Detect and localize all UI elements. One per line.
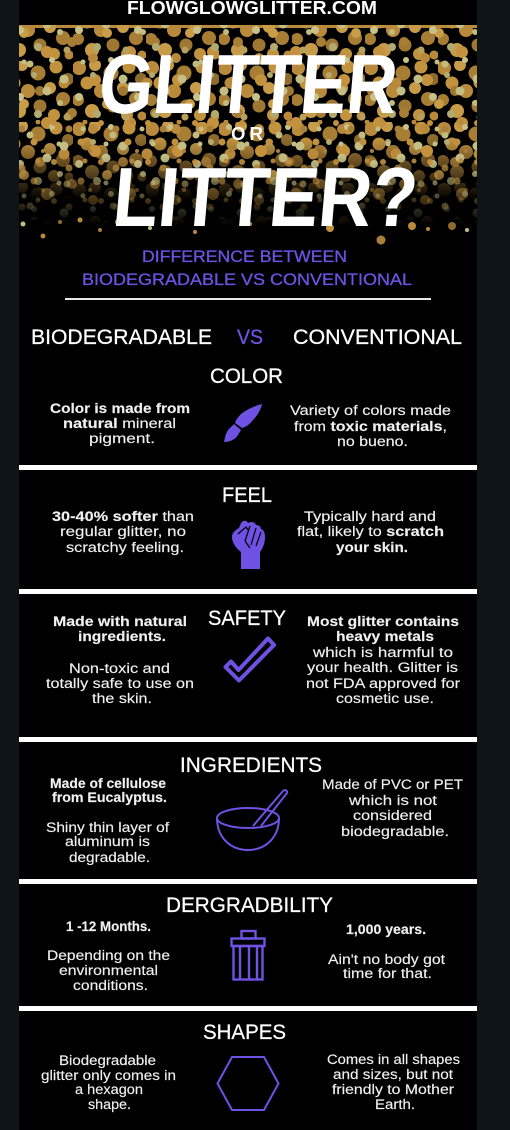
text: conventional safety: Most glitter contains xyxy=(307,614,459,629)
text: conventional shapes: friendly to Mother xyxy=(332,1082,455,1097)
title: litter?: LITTER? xyxy=(109,150,422,244)
text: biodegradable feel: regular glitter, no xyxy=(60,524,186,539)
text: conventional ingredients xyxy=(322,777,463,839)
icon: paintbrush xyxy=(224,404,262,442)
text: biodegradable ingredients xyxy=(46,776,169,865)
section: shapes xyxy=(41,1021,460,1112)
icon: trash can xyxy=(232,931,264,980)
text: biodegradable safety: totally safe to use on xyxy=(46,676,194,691)
text: biodegradable shapes: shape. xyxy=(88,1097,131,1112)
text: biodegradable degradability: environmental xyxy=(59,963,158,978)
text: conventional safety: your health. Glitter is xyxy=(307,660,458,675)
text: biodegradable shapes: a hexagon xyxy=(75,1082,143,1097)
text: biodegradable shapes: glitter only comes in xyxy=(41,1068,176,1083)
comparison header: CONVENTIONAL xyxy=(293,326,462,349)
text: conventional degradability xyxy=(328,922,445,981)
text: conventional ingredients: considered xyxy=(353,808,432,823)
heading: safety: SAFETY xyxy=(208,607,286,630)
icon: hexagon xyxy=(218,1057,278,1110)
text: biodegradable color: pigment. xyxy=(89,431,155,446)
text: conventional feel: flat, likely to scratch xyxy=(297,524,444,539)
text: conventional degradability: time for that. xyxy=(343,966,432,981)
text: biodegradable color: Color is made from xyxy=(50,401,190,416)
text: biodegradable feel: 30-40% softer than xyxy=(52,509,194,524)
text: biodegradable ingredients: degradable. xyxy=(69,850,150,865)
text: biodegradable ingredients: Shiny thin layer of xyxy=(46,820,169,835)
text: conventional color: from toxic materials , xyxy=(294,419,447,434)
icon: bowl and spoon xyxy=(217,790,287,850)
heading: feel: FEEL xyxy=(222,484,272,507)
text: conventional feel: your skin. xyxy=(336,540,408,555)
text: conventional degradability: Ain't no body got xyxy=(328,952,445,967)
section: safety xyxy=(46,607,461,706)
text: biodegradable degradability: 1 -12 Months. xyxy=(66,919,151,934)
icon: raised fist xyxy=(232,521,265,569)
text: biodegradable ingredients: from Eucalyptus. xyxy=(52,790,167,805)
text: biodegradable color: natural mineral xyxy=(63,416,176,431)
text: conventional color: Variety of colors made xyxy=(290,403,451,418)
text: biodegradable feel xyxy=(52,509,194,555)
text: biodegradable degradability: Depending on the xyxy=(47,948,170,963)
text: biodegradable color xyxy=(50,401,190,446)
heading: degradability: DERGRADBILITY xyxy=(166,894,333,917)
text: conventional color xyxy=(290,403,451,449)
icon: check mark xyxy=(226,638,274,680)
comparison header xyxy=(31,326,462,349)
text: biodegradable feel: scratchy feeling. xyxy=(66,540,184,555)
section: ingredients xyxy=(46,754,463,865)
section: degradability xyxy=(47,894,445,993)
text: conventional safety: heavy metals xyxy=(336,629,434,644)
heading: ingredients: INGREDIENTS xyxy=(180,754,322,777)
heading: color: COLOR xyxy=(210,365,283,388)
text: biodegradable degradability xyxy=(47,919,170,993)
text: conventional ingredients: which is not xyxy=(348,793,437,808)
text: biodegradable safety: Made with natural xyxy=(53,614,187,629)
subtitle: BIODEGRADABLE VS CONVENTIONAL xyxy=(82,270,412,289)
subtitle: DIFFERENCE BETWEEN xyxy=(142,247,347,266)
text: conventional feel: Typically hard and xyxy=(304,509,436,524)
heading: shapes: SHAPES xyxy=(203,1021,286,1044)
text: conventional shapes xyxy=(327,1052,460,1112)
text: biodegradable ingredients: aluminum is xyxy=(65,834,150,849)
title: or: OR xyxy=(231,124,267,144)
text: conventional ingredients: Made of PVC or PET xyxy=(322,777,463,792)
section: feel xyxy=(52,484,444,569)
text: conventional shapes: Comes in all shapes xyxy=(327,1052,460,1067)
text: biodegradable safety: ingredients. xyxy=(78,629,166,644)
text: conventional safety: not FDA approved for xyxy=(306,676,461,691)
text: biodegradable safety xyxy=(46,614,194,706)
text: conventional safety: which is harmful to xyxy=(312,645,453,660)
subtitle xyxy=(82,247,412,289)
text: conventional degradability: 1,000 years. xyxy=(346,922,426,937)
text: biodegradable ingredients: Made of cellulose xyxy=(50,776,167,791)
comparison header: BIODEGRADABLE xyxy=(31,326,212,349)
text: biodegradable shapes xyxy=(41,1053,176,1112)
text: conventional safety xyxy=(306,614,461,706)
section: color xyxy=(50,365,451,449)
text: conventional feel xyxy=(297,509,444,555)
text: biodegradable shapes: Biodegradable xyxy=(59,1053,156,1068)
title: glitter: GLITTER xyxy=(95,37,402,131)
text: biodegradable safety: the skin. xyxy=(92,691,152,706)
text: conventional shapes: and sizes, but not xyxy=(333,1067,453,1082)
text: conventional ingredients: biodegradable. xyxy=(341,824,449,839)
text: conventional color: no bueno. xyxy=(337,434,408,449)
title xyxy=(95,37,422,244)
text: conventional safety: cosmetic use. xyxy=(336,691,434,706)
text: biodegradable safety: Non-toxic and xyxy=(69,661,170,676)
text: conventional shapes: Earth. xyxy=(375,1097,415,1112)
comparison header: VS xyxy=(237,326,263,349)
gold glitter banner xyxy=(19,25,477,244)
text: biodegradable degradability: conditions. xyxy=(73,978,148,993)
